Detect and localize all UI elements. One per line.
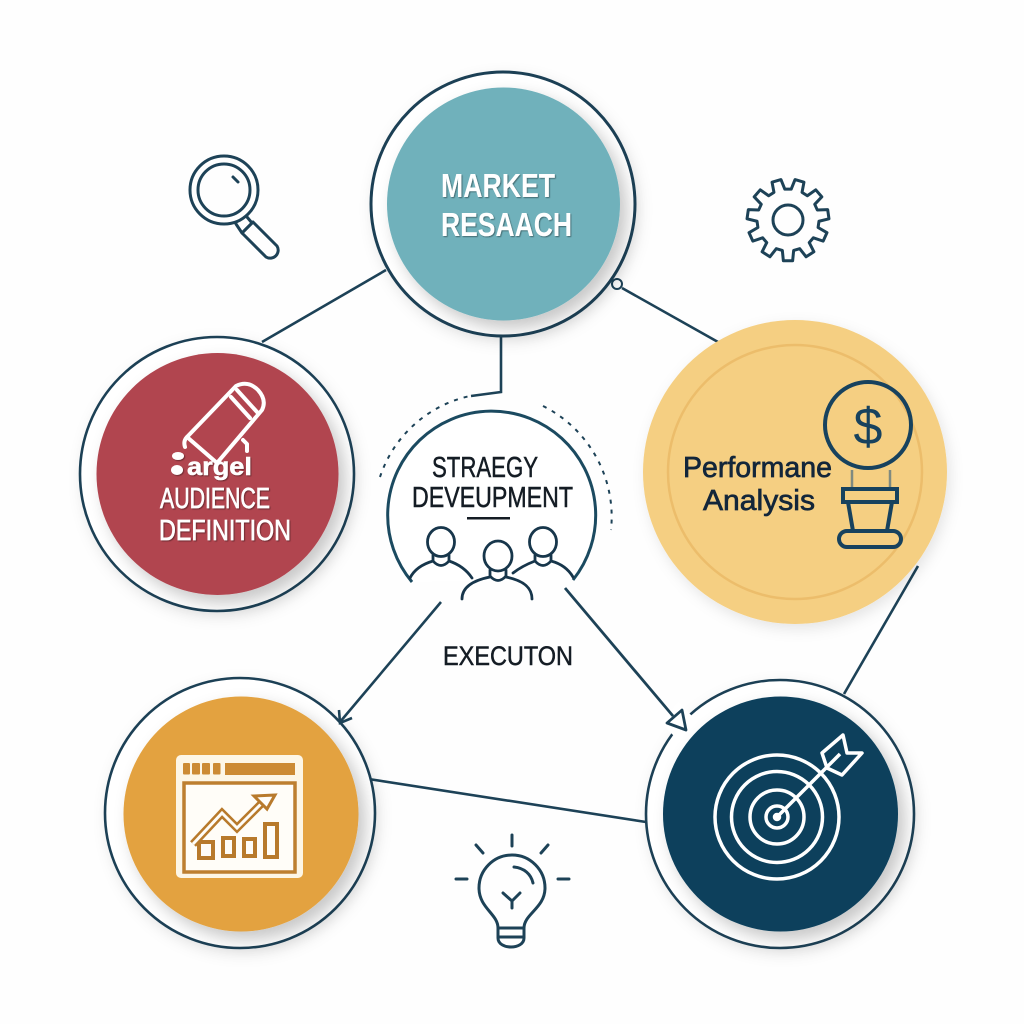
strategy label: DEVEUPMENT xyxy=(412,482,573,514)
node: orange chart xyxy=(105,678,375,948)
label: execution: EXECUTON xyxy=(443,641,573,671)
chart disc xyxy=(124,696,358,932)
performance disc xyxy=(643,320,947,624)
icon: coin on pot xyxy=(825,382,911,547)
performance label xyxy=(683,452,832,517)
arrow: strategy to target xyxy=(565,588,694,738)
target ring xyxy=(646,680,914,948)
icon: gear xyxy=(747,180,829,261)
market research ring xyxy=(371,72,635,336)
performance label: Analysis xyxy=(703,485,815,517)
audience label: AUDIENCE xyxy=(160,483,270,515)
chart ring xyxy=(105,678,375,948)
icon: light bulb xyxy=(456,835,569,947)
performance inner ring xyxy=(668,345,922,599)
audience label: argel xyxy=(187,453,252,481)
icon: people xyxy=(410,528,573,599)
icon: magnifying glass xyxy=(190,156,278,258)
strategy rule xyxy=(467,517,510,520)
strategy open circle xyxy=(388,411,596,582)
market research disc xyxy=(387,88,620,320)
audience label xyxy=(159,452,291,547)
node: navy target xyxy=(646,680,914,948)
icon: pencil xyxy=(184,384,264,463)
strategy label: STRAEGY xyxy=(432,452,538,484)
market research label: MARKET xyxy=(441,167,555,204)
icon: browser chart xyxy=(176,755,303,878)
market research label xyxy=(441,167,572,243)
arrow: strategy to chart xyxy=(339,602,441,723)
node: performance analysis xyxy=(643,320,947,624)
dashed arcs xyxy=(380,396,612,530)
node: market research xyxy=(371,72,635,336)
performance label: Performane xyxy=(683,452,832,484)
icon: target and arrow xyxy=(715,735,862,879)
icon: coin on pot: $ xyxy=(854,398,883,456)
connector lines xyxy=(262,270,918,822)
market research label: RESAACH xyxy=(441,206,572,243)
node: strategy development xyxy=(380,396,612,599)
audience disc xyxy=(96,353,338,595)
node: target audience definition xyxy=(80,337,354,611)
audience label: DEFINITION xyxy=(159,515,291,547)
target disc xyxy=(663,696,898,932)
strategy label xyxy=(412,452,573,514)
audience ring xyxy=(80,337,354,611)
